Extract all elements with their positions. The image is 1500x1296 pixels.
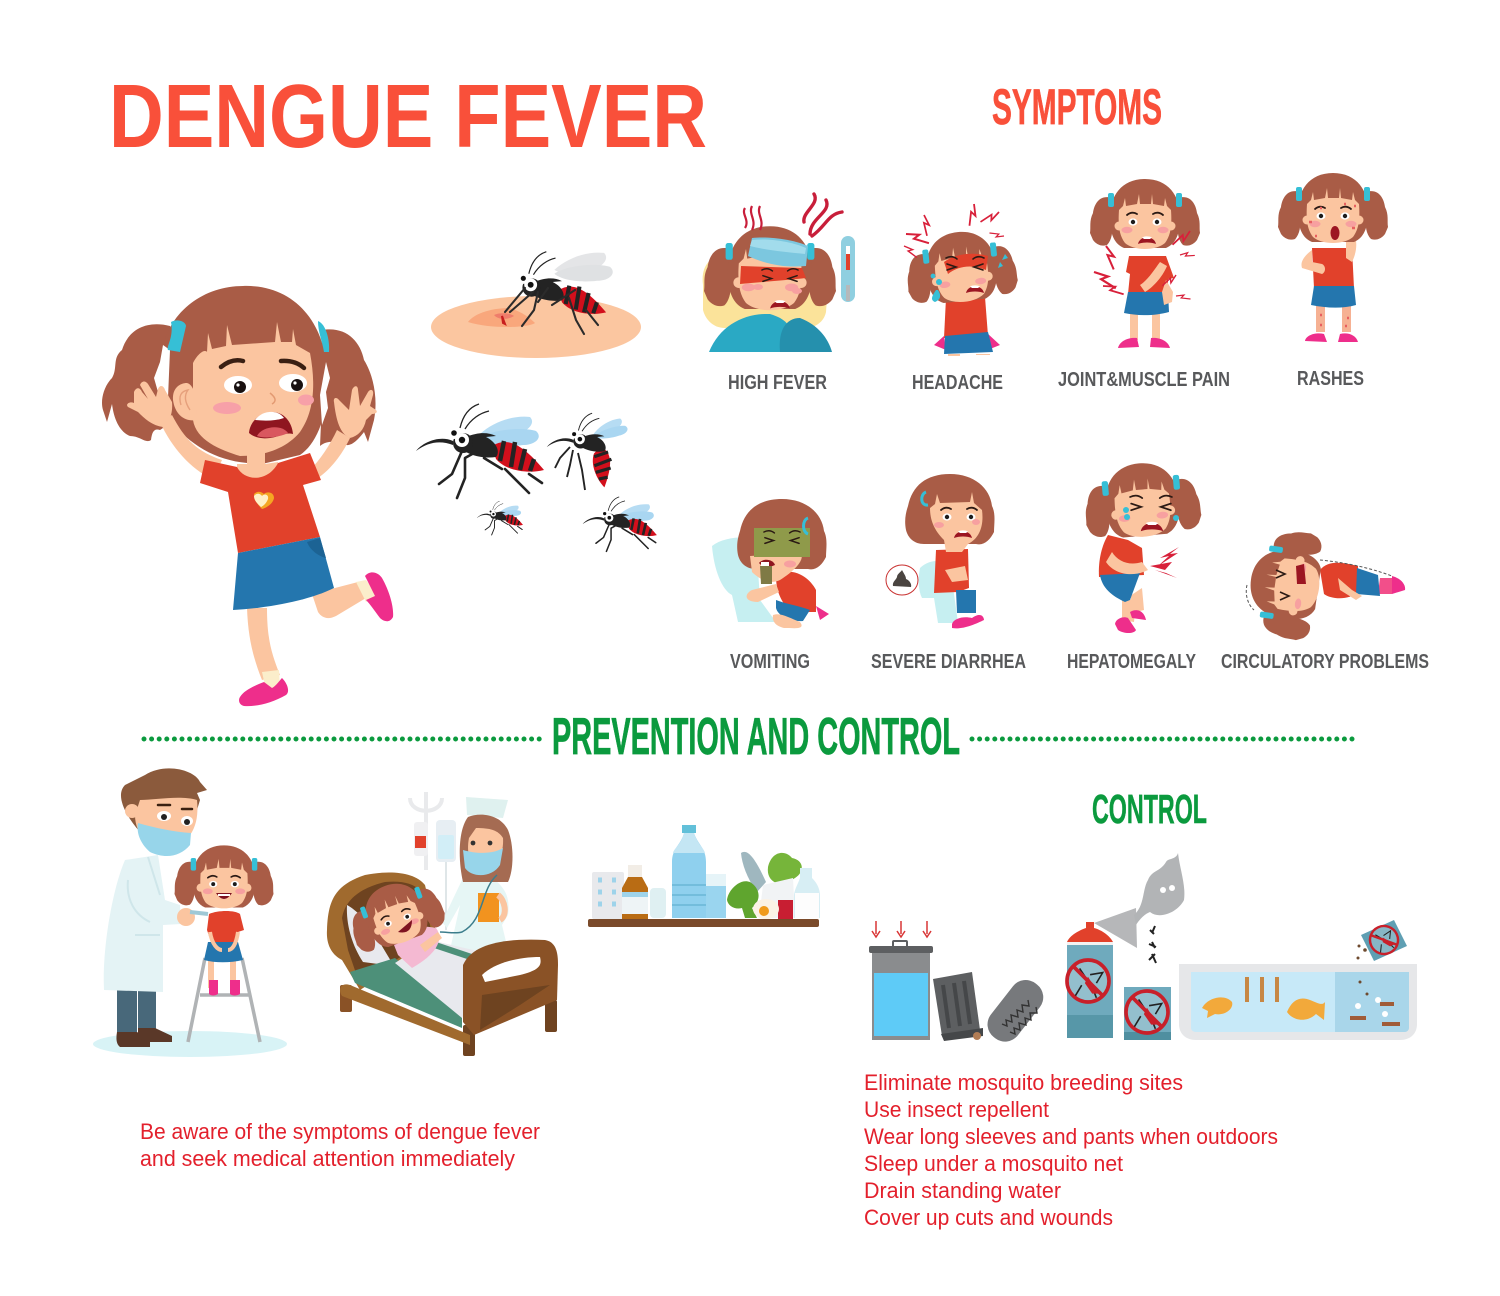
label: severe diarrhea: SEVERE DIARRHEA [871,651,1026,673]
label: headache: HEADACHE [912,372,1003,394]
label: hepatomegaly: HEPATOMEGALY [1067,651,1197,673]
main scared girl illustration [102,286,393,706]
symptom: joint and muscle pain [1090,179,1200,348]
advice text: symptoms: and seek medical attention immediately [140,1146,515,1171]
control measures list: Drain standing water [864,1178,1061,1203]
symptoms heading: SYMPTOMS [992,79,1162,135]
label: vomiting: VOMITING [730,651,810,673]
symptom: severe diarrhea [886,474,994,628]
label: circulatory problems: CIRCULATORY PROBLEMS [1221,651,1429,673]
nurse and child in hospital bed illustration [327,792,558,1056]
symptom: headache [902,204,1019,356]
control heading: CONTROL [1092,786,1207,832]
nutrition shelf illustration [588,825,820,927]
control measures list: Use insect repellent [864,1097,1049,1122]
symptom: hepatomegaly [1081,458,1203,633]
section divider with heading: prevention and control: PREVENTION AND CONTROL [552,708,960,766]
advice text: symptoms [140,1119,540,1171]
advice text: symptoms: Be aware of the symptoms of dengue fever [140,1119,540,1144]
label: high fever: HIGH FEVER [728,372,827,394]
symptom: vomiting [712,499,829,628]
label: rashes: RASHES [1297,368,1364,390]
label: joint and muscle pain: JOINT&MUSCLE PAIN [1058,369,1230,391]
title: DENGUE FEVER [109,67,707,167]
control measures list: Cover up cuts and wounds [864,1205,1113,1230]
doctor vaccinating girl illustration [93,768,287,1057]
control: fish tank with larvicide packet [1179,920,1417,1040]
symptom: rashes [1278,173,1388,342]
symptom: circulatory problems [1244,526,1405,642]
control measures list: Wear long sleeves and pants when outdoors [864,1124,1278,1149]
control measures list: Eliminate mosquito breeding sites [864,1070,1183,1095]
control measures list [864,1070,1278,1230]
flying mosquitoes [416,404,657,551]
mosquito biting skin [431,252,641,358]
control: insect repellent spray and smoke [1067,853,1184,1040]
control measures list: Sleep under a mosquito net [864,1151,1123,1176]
symptom: high fever [703,194,855,352]
control: covered bins and tire [869,921,1050,1048]
